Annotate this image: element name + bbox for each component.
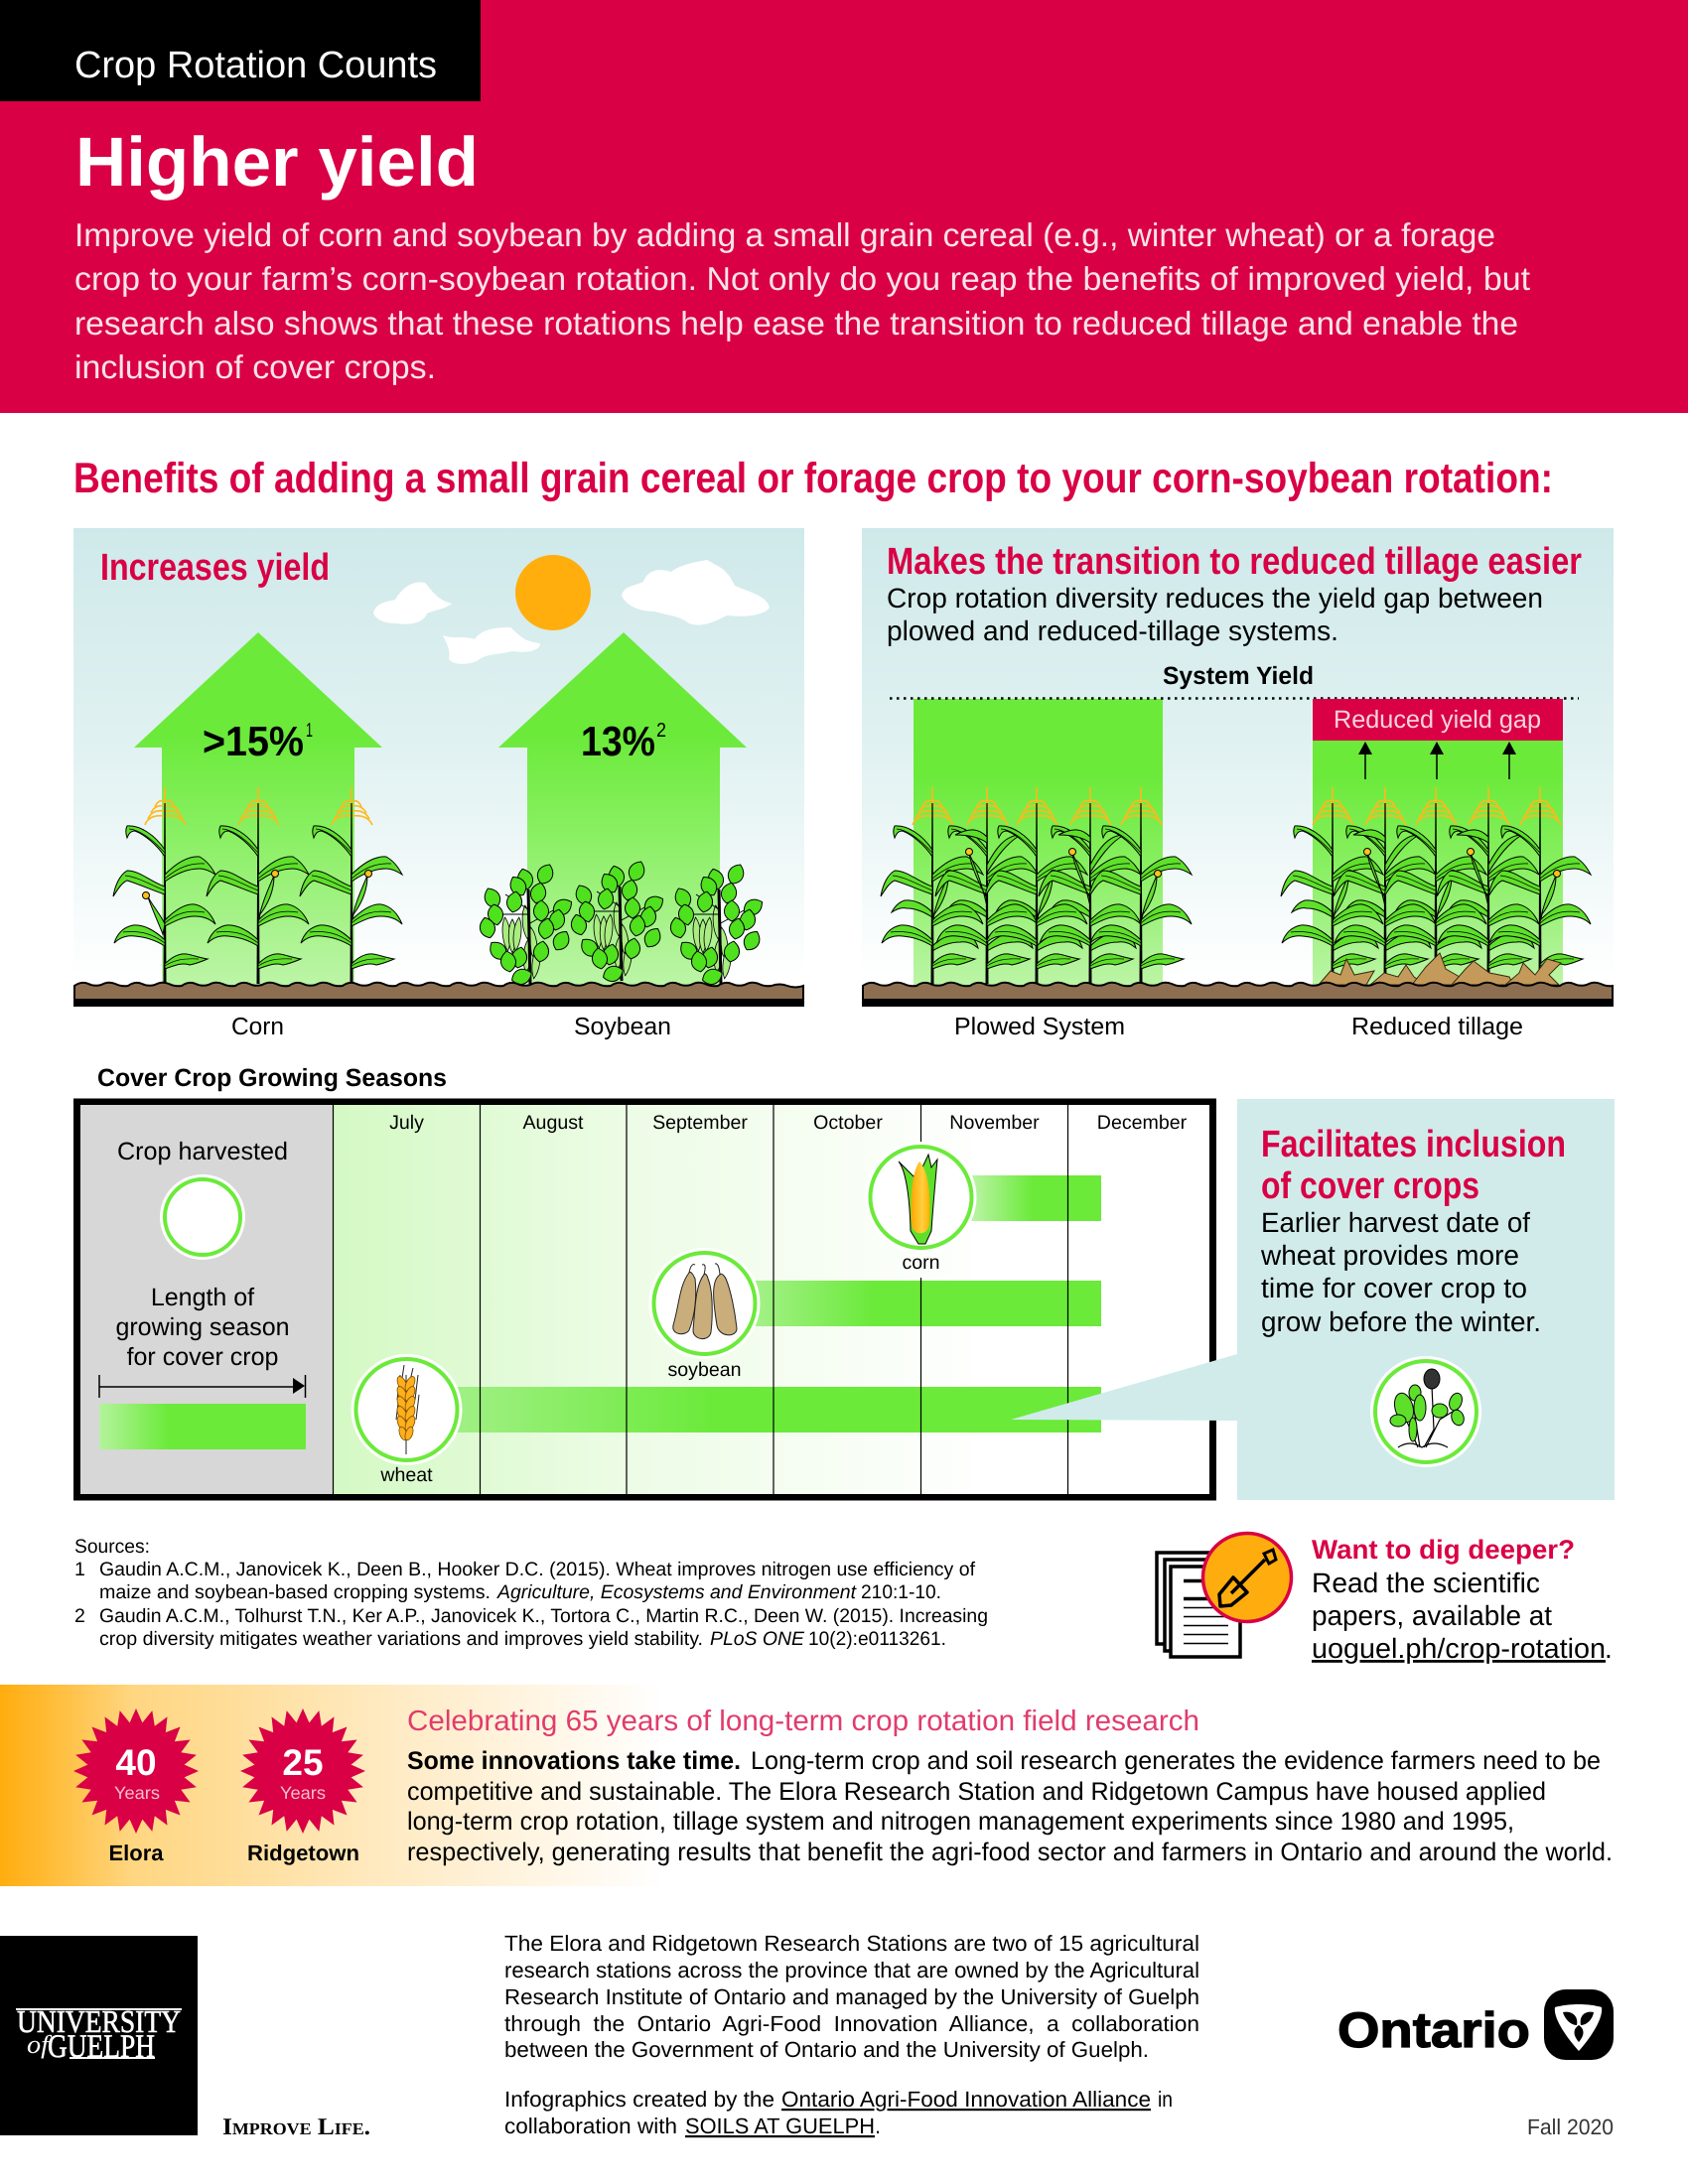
arrow: corn yield [134,632,382,988]
credits: SOILS AT GUELPH [685,2114,875,2138]
footer note [504,1931,1199,2138]
badge: Elora 40 years: Years [114,1783,160,1803]
band paragraph [407,1747,1613,1866]
panel description: wheat provides more [1260,1240,1519,1271]
tagline: Improve Life. [222,2115,370,2140]
label: soybean: Soybean [574,1014,671,1040]
logo: University of Guelph: GUELPH [48,2029,155,2065]
band paragraph: Long-term crop and soil research generates the evidence farmers need to be [751,1747,1601,1775]
credits [504,2087,1173,2138]
panel: long-term research band [0,1685,1613,1886]
reduced tillage yield bar [1313,699,1563,987]
legend: key panel: Length of [151,1284,254,1311]
source 1: Agriculture, Ecosystems and Environment [496,1581,858,1603]
credits: Ontario Agri-Food Innovation Alliance [781,2087,1151,2112]
source 2: 2 [74,1605,85,1627]
month labels: December [1097,1112,1188,1134]
panel: increases yield [73,528,804,1040]
source 2: crop diversity mitigates weather variations and improves yield stability. [99,1628,703,1650]
callout: want to dig deeper: . [1605,1633,1613,1664]
system yield dotted line [890,697,1579,700]
callout: want to dig deeper: Want to dig deeper? [1312,1535,1575,1565]
month labels: August [522,1112,584,1134]
source 2: Gaudin A.C.M., Tolhurst T.N., Ker A.P., Janovicek K., Tortora C., Martin R.C., Deen W. (2015). Increasing [99,1605,988,1627]
badge: Ridgetown 25 years: Years [280,1783,326,1803]
source 1: 1 [74,1559,85,1580]
footer note: through the Ontario Agri-Food Innovation Alliance, a collaboration [504,2011,1199,2036]
series label tab: Crop Rotation Counts [74,45,437,86]
month labels: September [652,1112,748,1134]
panel heading: of cover crops [1261,1165,1479,1207]
crop residue [1319,953,1561,985]
source 2: 10(2):e0113261. [808,1628,946,1650]
source 1: 210:1-10. [861,1581,941,1603]
source 2 [74,1605,988,1650]
panel heading: Makes the transition to reduced tillage easier [887,541,1582,583]
band paragraph: long-term crop rotation, tillage system and nitrogen management experiments since 1980 and 1995, [407,1808,1514,1836]
logo: University of Guelph: of [27,2030,53,2059]
bar: soybean cover crop season [755,1281,1101,1326]
callout: want to dig deeper [1312,1535,1613,1664]
chart frame [77,1102,1213,1497]
month columns background [334,1105,1209,1494]
label: reduced tillage: Reduced tillage [1351,1014,1523,1040]
month labels: November [949,1112,1040,1134]
icon: corn harvest: corn [902,1252,940,1274]
legend: key panel: for cover crop [127,1343,278,1371]
source 1 [74,1559,976,1603]
panel description: time for cover crop to [1261,1273,1527,1303]
arrows: gap closing [1358,742,1516,779]
badge: Elora 40 years: 40 [115,1742,157,1783]
source 2: PLoS ONE [710,1628,805,1650]
sources: Sources: [74,1536,150,1558]
legend: key panel: Crop harvested [117,1138,288,1165]
source 1: Gaudin A.C.M., Janovicek K., Deen B., Hooker D.C. (2015). Wheat improves nitrogen use efficiency of [99,1559,976,1580]
logo: University of Guelph: UNIVERSITY [17,2003,181,2039]
intro paragraph: crop to your farm’s corn-soybean rotation. Not only do you reap the benefits of improved yield, but [74,260,1530,297]
icon: wheat harvest [352,1354,463,1486]
main title: Higher yield [75,123,479,201]
callout: want to dig deeper: papers, available at [1312,1600,1552,1631]
panel heading: Facilitates inclusion [1261,1124,1566,1165]
soil [73,983,804,1007]
callout: reduced yield gap: Reduced yield gap [1334,706,1541,734]
stat: corn yield increase: >15% [203,718,304,764]
stat: soybean yield increase: 13% [581,718,655,764]
chart: cover crop growing seasons [77,1102,1213,1497]
month labels: July [389,1112,424,1134]
corn plants: reduced tillage [1281,787,1591,984]
date: Fall 2020 [1527,2115,1614,2139]
label: system yield: System Yield [1163,662,1314,690]
label: plowed system: Plowed System [954,1014,1125,1040]
icon: wheat harvest: wheat [379,1464,433,1486]
logo: Ontario: Ontario [1337,2002,1530,2058]
badge: Elora 40 years: Elora [108,1841,164,1865]
panel: facilitates inclusion of cover crops [1011,1099,1615,1500]
icon: soybean harvest [649,1248,761,1381]
header banner [0,0,1688,413]
icon: clouds [373,560,770,664]
legend: key panel: growing season [115,1313,290,1341]
stat: corn yield increase: 1 [306,720,313,742]
badge: Ridgetown 25 years: Ridgetown [247,1841,359,1865]
panel description [887,583,1543,646]
band heading: Celebrating 65 years of long-term crop rotation field research [407,1706,1199,1737]
callout pointer [1011,1354,1237,1421]
corn plants: plowed system [881,787,1192,984]
footer note: Research Institute of Ontario and managed by the University of Guelph [504,1984,1199,2009]
month labels [389,1112,1188,1134]
panel description: plowed and reduced-tillage systems. [887,615,1338,646]
badge: Ridgetown 25 years [240,1708,365,1865]
legend: key panel [80,1105,334,1494]
soil [862,983,1614,1007]
band paragraph: respectively, generating results that benefit the agri-food sector and farmers in Ontario and around the world. [407,1839,1613,1866]
footer note: between the Government of Ontario and the University of Guelph. [504,2037,1149,2062]
panel description: grow before the winter. [1261,1306,1541,1337]
bar: corn cover crop season [971,1175,1101,1221]
credits: in [1158,2087,1173,2112]
series label tab [0,0,481,101]
arrow: soybean yield [498,632,747,988]
intro paragraph: Improve yield of corn and soybean by adding a small grain cereal (e.g., winter wheat) or a forage [74,216,1495,253]
icon: corn harvest [866,1142,977,1274]
panel description [1260,1207,1541,1337]
icon: sun [515,555,591,630]
panel description: Earlier harvest date of [1261,1207,1530,1238]
badge: Elora 40 years [73,1708,199,1865]
soybean plants [478,859,766,987]
intro paragraph: research also shows that these rotations help ease the transition to reduced tillage and enable the [74,305,1518,341]
logo: University of Guelph [0,1936,198,2135]
chart heading: Cover Crop Growing Seasons [97,1064,447,1092]
bar: wheat cover crop season [457,1387,1101,1433]
panel: reduced tillage [862,528,1614,1040]
callout: want to dig deeper: Read the scientific [1312,1568,1540,1598]
credits: Infographics created by the [504,2087,774,2112]
plowed system yield bar [914,699,1163,987]
intro paragraph [74,216,1530,385]
month labels: October [813,1112,883,1134]
panel description: Crop rotation diversity reduces the yield gap between [887,583,1543,614]
intro paragraph: inclusion of cover crops. [74,348,436,385]
icon: soybean harvest: soybean [667,1359,742,1381]
corn plants [113,787,402,984]
logo: Ontario [1337,1989,1614,2060]
panel heading [1261,1124,1566,1207]
sources [74,1536,988,1650]
icon: papers and shovel [1157,1533,1291,1657]
credits: collaboration with [504,2114,677,2138]
footer note: The Elora and Ridgetown Research Stations are two of 15 agricultural [504,1931,1199,1956]
source 1: maize and soybean-based cropping systems. [99,1581,491,1603]
footer note: research stations across the province that are owned by the Agricultural [504,1958,1199,1982]
stat: soybean yield increase: 2 [656,720,666,742]
callout: reduced yield gap [1313,699,1563,741]
label: corn: Corn [231,1014,284,1040]
callout: want to dig deeper: uoguel.ph/crop-rotation [1312,1633,1606,1664]
icon: clover [1370,1356,1481,1467]
band paragraph: competitive and sustainable. The Elora Research Station and Ridgetown Campus have housed applied [407,1778,1546,1806]
panel heading: Increases yield [100,547,330,589]
band paragraph: Some innovations take time. [407,1747,741,1775]
badge: Ridgetown 25 years: 25 [282,1742,324,1783]
credits: . [875,2114,881,2138]
month dividers [334,1105,1068,1494]
